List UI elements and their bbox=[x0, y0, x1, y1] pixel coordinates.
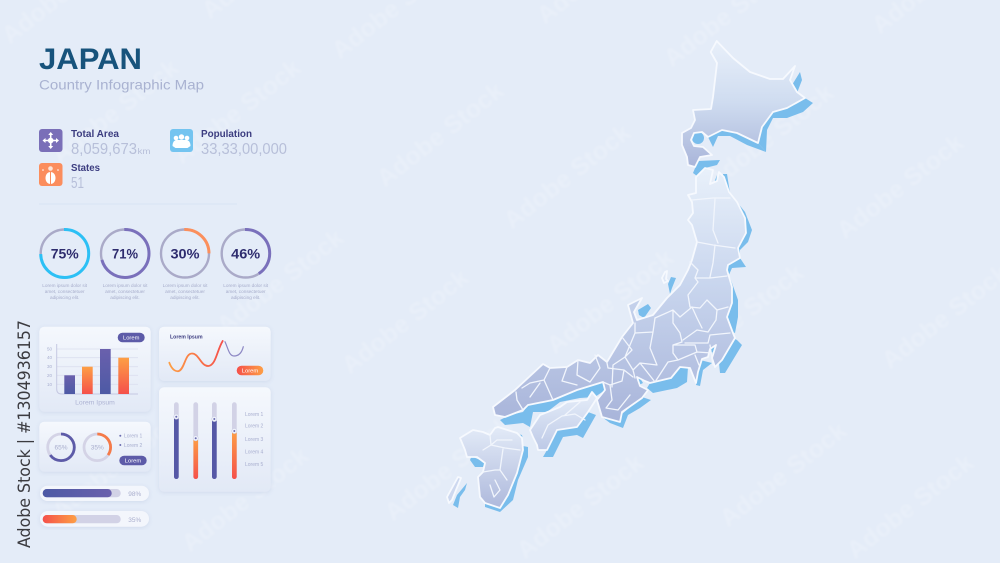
donut 30% bbox=[161, 230, 209, 300]
stat: states bbox=[39, 163, 100, 192]
panel: bar chart: Lorem bbox=[123, 336, 140, 342]
watermarks: Adobe Stock bbox=[46, 54, 184, 170]
panel: sliders bbox=[159, 387, 271, 492]
watermarks: Adobe Stock bbox=[714, 417, 852, 533]
stat: population: 33,33,00,000 bbox=[201, 141, 287, 158]
donut 71%: amet, consectetuer bbox=[105, 289, 145, 294]
donut 75%: Lorem ipsum dolor sit bbox=[42, 283, 88, 288]
stock id label: Adobe Stock | #1304936157 bbox=[15, 320, 35, 548]
watermarks: Adobe Stock bbox=[336, 264, 474, 380]
subtitle: Country Infographic Map bbox=[39, 76, 204, 92]
panel: sliders: Lorem 5 bbox=[245, 462, 264, 468]
map of Japan bbox=[447, 41, 813, 512]
map: Kyushu bbox=[460, 427, 523, 508]
panel: bar chart: 50 bbox=[47, 346, 52, 352]
panel: mini donuts: Lorem 1 bbox=[124, 434, 143, 440]
panel: bar chart: 40 bbox=[47, 355, 52, 360]
progress bar 35% bbox=[40, 511, 149, 527]
watermarks: Adobe Stock bbox=[211, 224, 349, 340]
donut 71%: adipiscing elit. bbox=[110, 295, 140, 300]
donut 46%: 46% bbox=[231, 245, 261, 261]
donut 30%: 30% bbox=[170, 245, 200, 261]
donut 75%: amet, consectetuer bbox=[45, 289, 85, 294]
donut 46% bbox=[222, 229, 270, 300]
watermarks: Adobe Stock bbox=[841, 449, 979, 563]
panel: bar chart: 10 bbox=[47, 382, 52, 387]
map: coastal shadows bbox=[453, 72, 813, 512]
panel: bar chart: Lorem Ipsum bbox=[75, 400, 115, 406]
donut 46%: Lorem ipsum dolor sit bbox=[223, 283, 269, 288]
panel: wave chart bbox=[159, 327, 271, 381]
icon: people bbox=[170, 129, 193, 152]
stat: total area: 8,059,673 bbox=[71, 141, 137, 158]
progress bar 98%: 98% bbox=[128, 491, 142, 498]
donut 46%: adipiscing elit. bbox=[231, 295, 260, 300]
donut 46%: amet, consectetuer bbox=[226, 289, 266, 294]
watermarks: Adobe Stock bbox=[701, 79, 839, 195]
donut 30%: adipiscing elit. bbox=[170, 295, 200, 300]
donut 71%: Lorem ipsum dolor sit bbox=[103, 283, 148, 288]
map: Honshu bbox=[493, 168, 746, 422]
panel: bar chart: 30 bbox=[47, 364, 52, 369]
donut 30%: amet, consectetuer bbox=[165, 289, 205, 294]
panel: bar chart bbox=[39, 327, 151, 412]
progress bar 35%: 35% bbox=[128, 517, 142, 524]
icon: move arrows bbox=[39, 129, 62, 152]
panel: wave chart: Lorem Ipsum bbox=[170, 335, 203, 341]
stat: total area: km bbox=[138, 147, 151, 156]
panel: sliders: Lorem 3 bbox=[245, 437, 264, 443]
title: JAPAN bbox=[39, 43, 142, 76]
stat: total area: Total Area bbox=[71, 129, 119, 140]
panel: sliders: Lorem 2 bbox=[245, 424, 264, 430]
panel: mini donuts: Lorem 2 bbox=[124, 443, 143, 449]
progress bar 98% bbox=[40, 486, 149, 501]
watermarks: Adobe Stock bbox=[176, 442, 314, 558]
watermarks: Adobe Stock bbox=[671, 259, 809, 375]
stat: total area bbox=[39, 129, 151, 158]
watermarks: Adobe Stock bbox=[168, 54, 306, 170]
donut 71% bbox=[101, 230, 149, 300]
watermarks: Adobe Stock bbox=[831, 129, 969, 245]
donut 30%: Lorem ipsum dolor sit bbox=[163, 283, 208, 288]
watermarks: Adobe Stock bbox=[541, 244, 679, 360]
map: small islands bbox=[447, 271, 668, 503]
stat: population bbox=[170, 129, 287, 158]
panel: mini donuts: Lorem bbox=[125, 458, 141, 464]
panel: mini donuts: 65% bbox=[54, 444, 68, 452]
panel: wave chart: Lorem bbox=[242, 368, 258, 374]
icon: person bbox=[39, 163, 62, 186]
donut 75%: adipiscing elit. bbox=[50, 295, 79, 300]
watermarks: Adobe Stock bbox=[46, 409, 184, 525]
stat: states: States bbox=[71, 163, 100, 174]
donut 75%: 75% bbox=[51, 245, 79, 261]
panel: bar chart: 20 bbox=[47, 373, 52, 378]
panel: sliders: Lorem 4 bbox=[245, 450, 264, 456]
watermarks: Adobe Stock bbox=[498, 119, 636, 235]
watermarks: Adobe Stock bbox=[511, 449, 649, 563]
donut 71%: 71% bbox=[112, 245, 139, 261]
panel: sliders: Lorem 1 bbox=[245, 412, 264, 418]
watermarks: Adobe Stock bbox=[379, 411, 517, 527]
panel: mini donuts bbox=[39, 422, 151, 472]
donut 75% bbox=[41, 230, 89, 300]
map: Shikoku bbox=[530, 392, 597, 450]
map: Hokkaido bbox=[682, 41, 805, 167]
stat: states: 51 bbox=[71, 175, 84, 192]
map: Honshu prefecture borders bbox=[516, 198, 735, 410]
watermarks: Adobe Stock bbox=[371, 77, 509, 193]
panel: mini donuts: 35% bbox=[91, 444, 104, 452]
stat: population: Population bbox=[201, 129, 252, 140]
